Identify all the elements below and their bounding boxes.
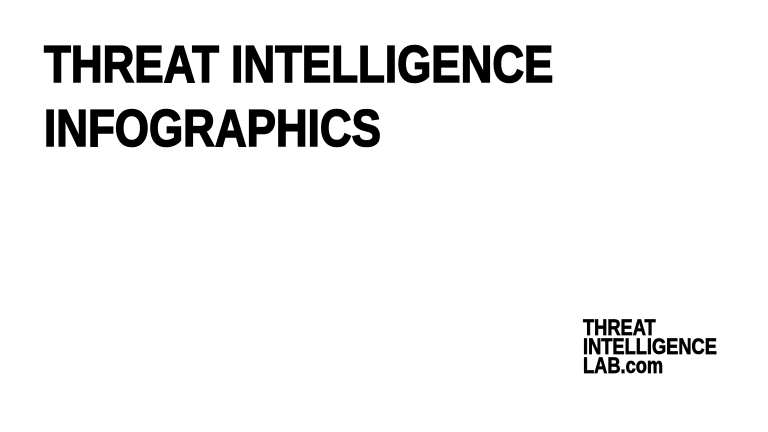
logo: LAB.com <box>583 353 663 378</box>
title: INFOGRAPHICS <box>44 100 381 158</box>
title: THREAT INTELLIGENCE <box>44 36 553 94</box>
logo: INTELLIGENCE <box>583 334 717 359</box>
title <box>44 36 553 158</box>
logo: THREAT <box>583 315 656 340</box>
logo <box>582 315 717 378</box>
